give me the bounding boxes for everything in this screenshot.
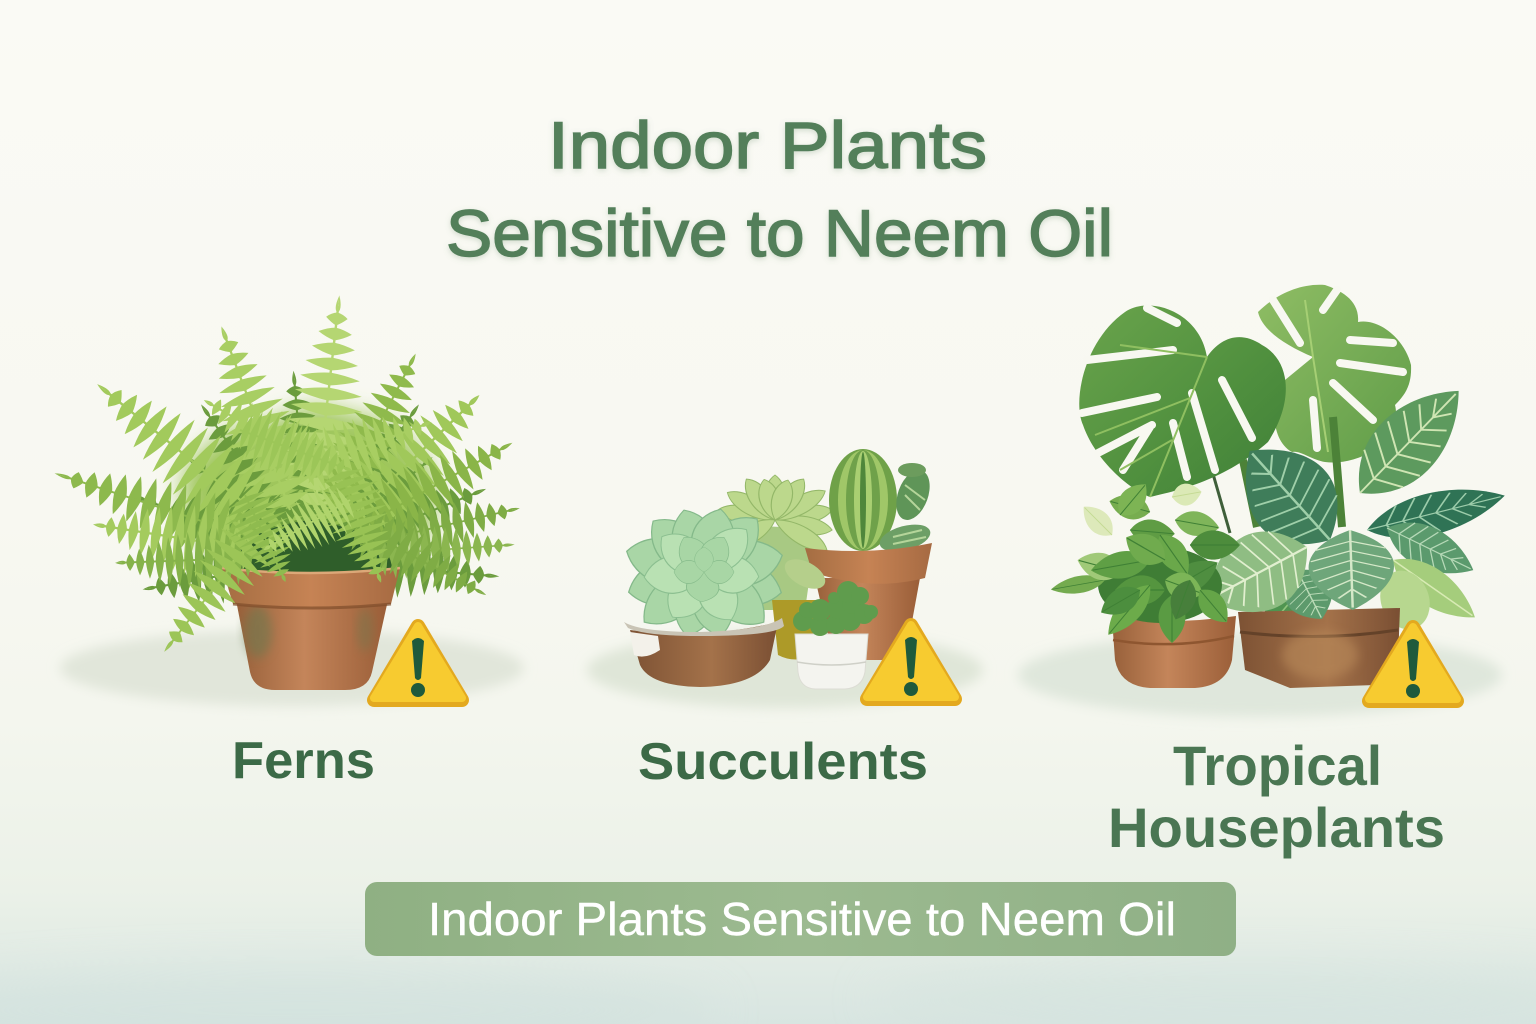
monstera rear leaf [1258,285,1411,462]
second succulent rosette [716,473,834,610]
ball cactus [793,581,878,636]
label: tropical houseplants: Tropical [1173,734,1382,797]
footer banner [365,882,1236,956]
monstera front leaf [1079,306,1286,497]
yellow pot [772,600,820,660]
ground shadow: tropical [1018,633,1502,717]
plant: tropical houseplants [1049,285,1510,688]
striped foliage [1218,368,1510,639]
label: ferns: Ferns [232,732,375,790]
plant: fern in pot [45,291,528,690]
footer banner: Indoor Plants Sensitive to Neem Oil [428,893,1176,945]
title [446,108,1113,270]
echeveria rosette [621,504,787,641]
small leafy plant [1049,477,1240,643]
cactus [829,449,936,556]
bowl pot [624,618,784,687]
warning icon: ferns [374,626,462,700]
label: tropical houseplants: Houseplants [1108,796,1445,859]
ground shadow: succulents [587,632,983,708]
fern pot [222,568,400,690]
title: Indoor Plants [548,108,987,182]
title: Sensitive to Neem Oil [446,196,1113,270]
plant: succulents group [621,449,936,689]
warning icon: succulents [867,625,955,699]
plant stems [1243,417,1342,527]
variegated foreground leaves [1189,513,1395,635]
warning icon: tropical [1369,627,1457,701]
white pot [795,634,868,689]
left pot [1112,616,1236,688]
label: tropical houseplants [1108,734,1445,859]
terracotta pot [805,543,932,660]
ground shadow: ferns [60,630,524,706]
yellow-green bud [780,553,830,595]
label: succulents: Succulents [638,733,928,791]
right pot [1238,608,1400,688]
